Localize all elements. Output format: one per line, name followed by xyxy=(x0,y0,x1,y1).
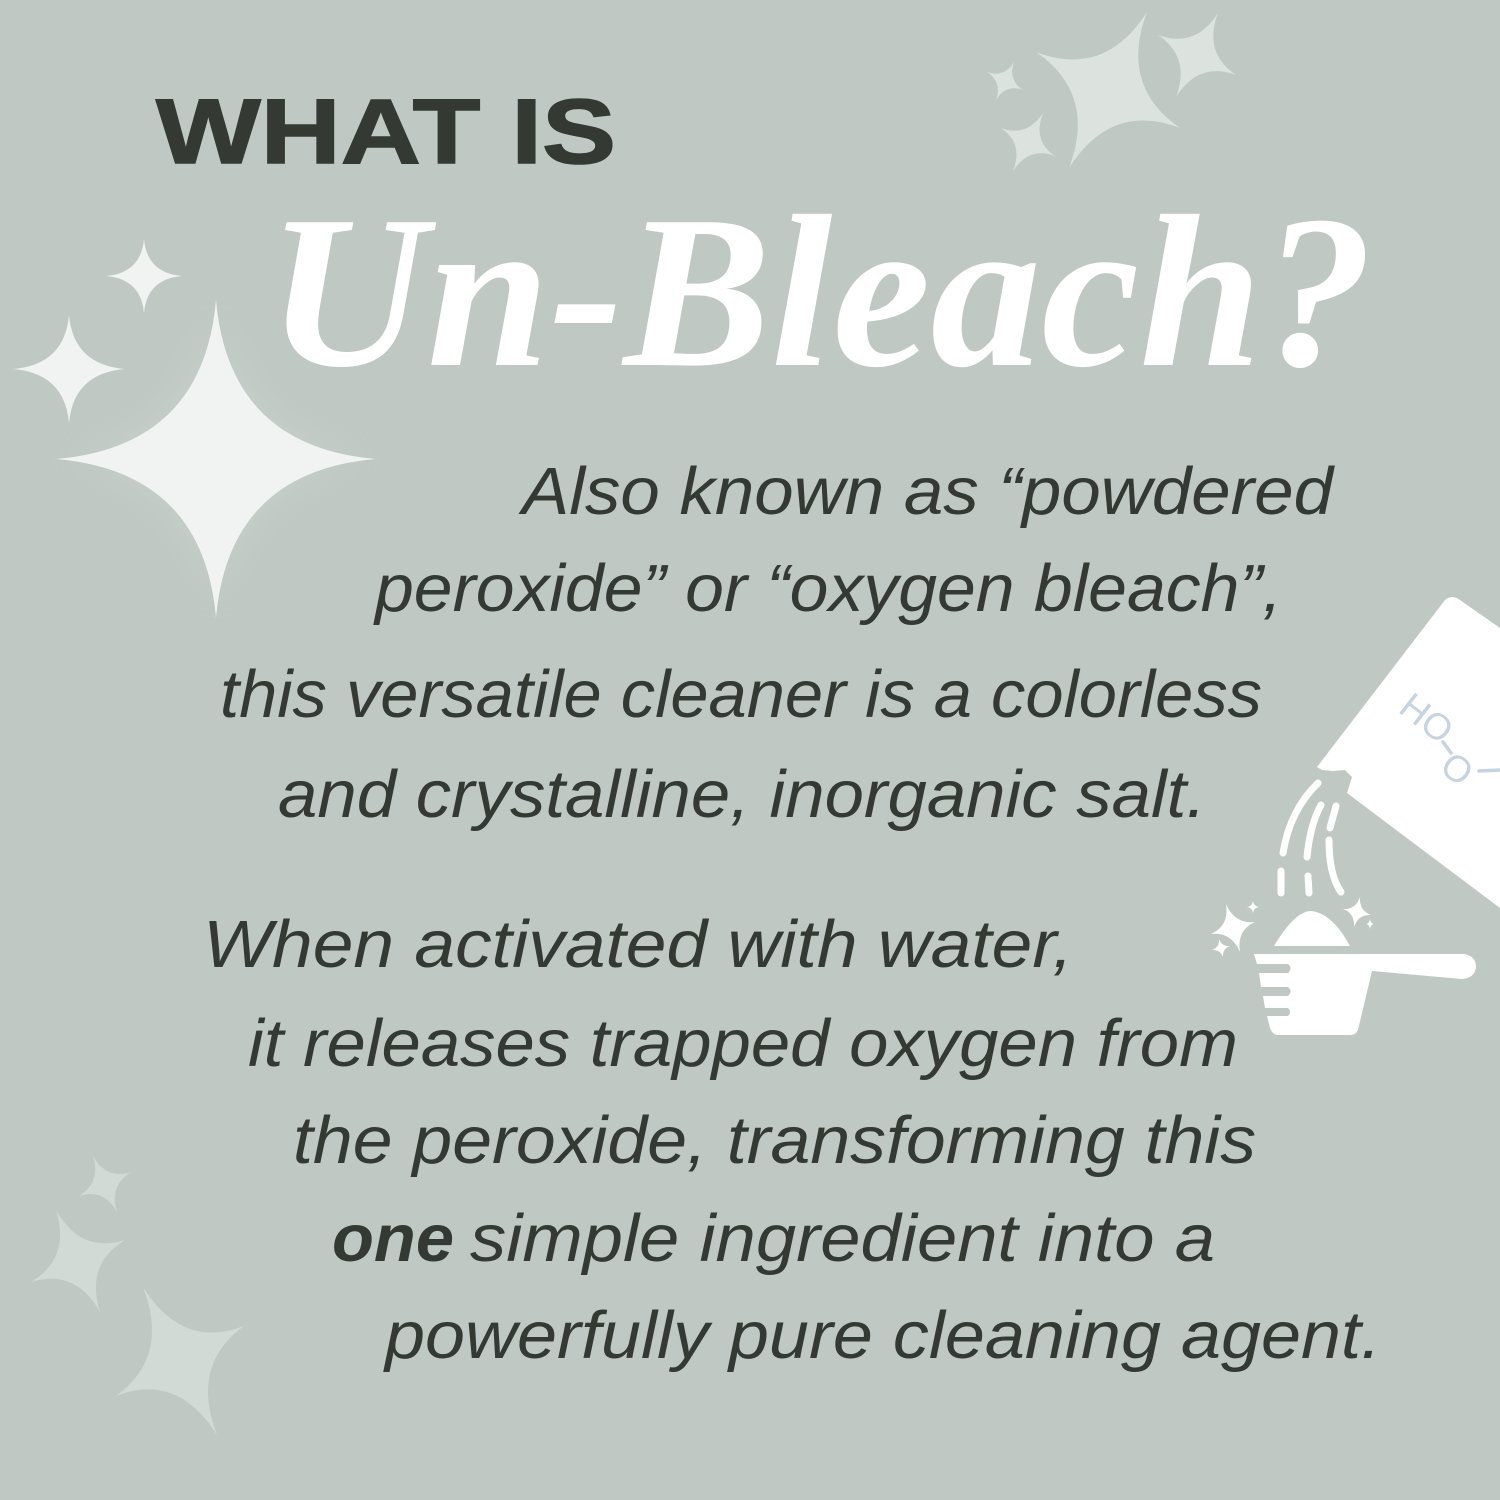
text block: definition: peroxide” or “oxygen bleach”, xyxy=(373,551,1282,626)
text block: definition: this versatile cleaner is a colorless xyxy=(220,657,1262,732)
bag xyxy=(1317,597,1500,908)
icon: peroxide bag pouring into scoop xyxy=(1204,597,1500,1035)
text block: definition: Also known as “powdered xyxy=(518,454,1336,529)
text block: activation: powerfully pure cleaning agent. xyxy=(383,1298,1381,1373)
text block: activation: the peroxide, transforming this xyxy=(293,1103,1256,1178)
text block: definition: and crystalline, inorganic salt. xyxy=(278,757,1206,832)
sparkles: left large white xyxy=(13,239,376,618)
text block: activation: simple ingredient into a xyxy=(470,1201,1215,1276)
powder streams xyxy=(1281,783,1341,893)
text block: definition xyxy=(220,454,1336,832)
text block: activation: When activated with water, xyxy=(203,907,1073,982)
chemical formula on bag xyxy=(1392,685,1500,794)
chemical formula on bag: HO xyxy=(1392,685,1461,751)
powder mound xyxy=(1274,911,1350,946)
heading: what is: WHAT IS xyxy=(156,81,616,183)
title: Un-Bleach?: Un-Bleach? xyxy=(267,172,1373,413)
text block: activation: it releases trapped oxygen from xyxy=(248,1006,1238,1081)
sparkles near scoop xyxy=(1204,894,1374,959)
text block: activation xyxy=(203,907,1381,1373)
text block: activation: one xyxy=(332,1201,454,1276)
sparkles: top right xyxy=(978,0,1257,206)
sparkles: bottom left xyxy=(9,1144,281,1470)
measuring scoop xyxy=(1254,954,1476,1035)
chemical formula on bag: O xyxy=(1433,744,1481,794)
